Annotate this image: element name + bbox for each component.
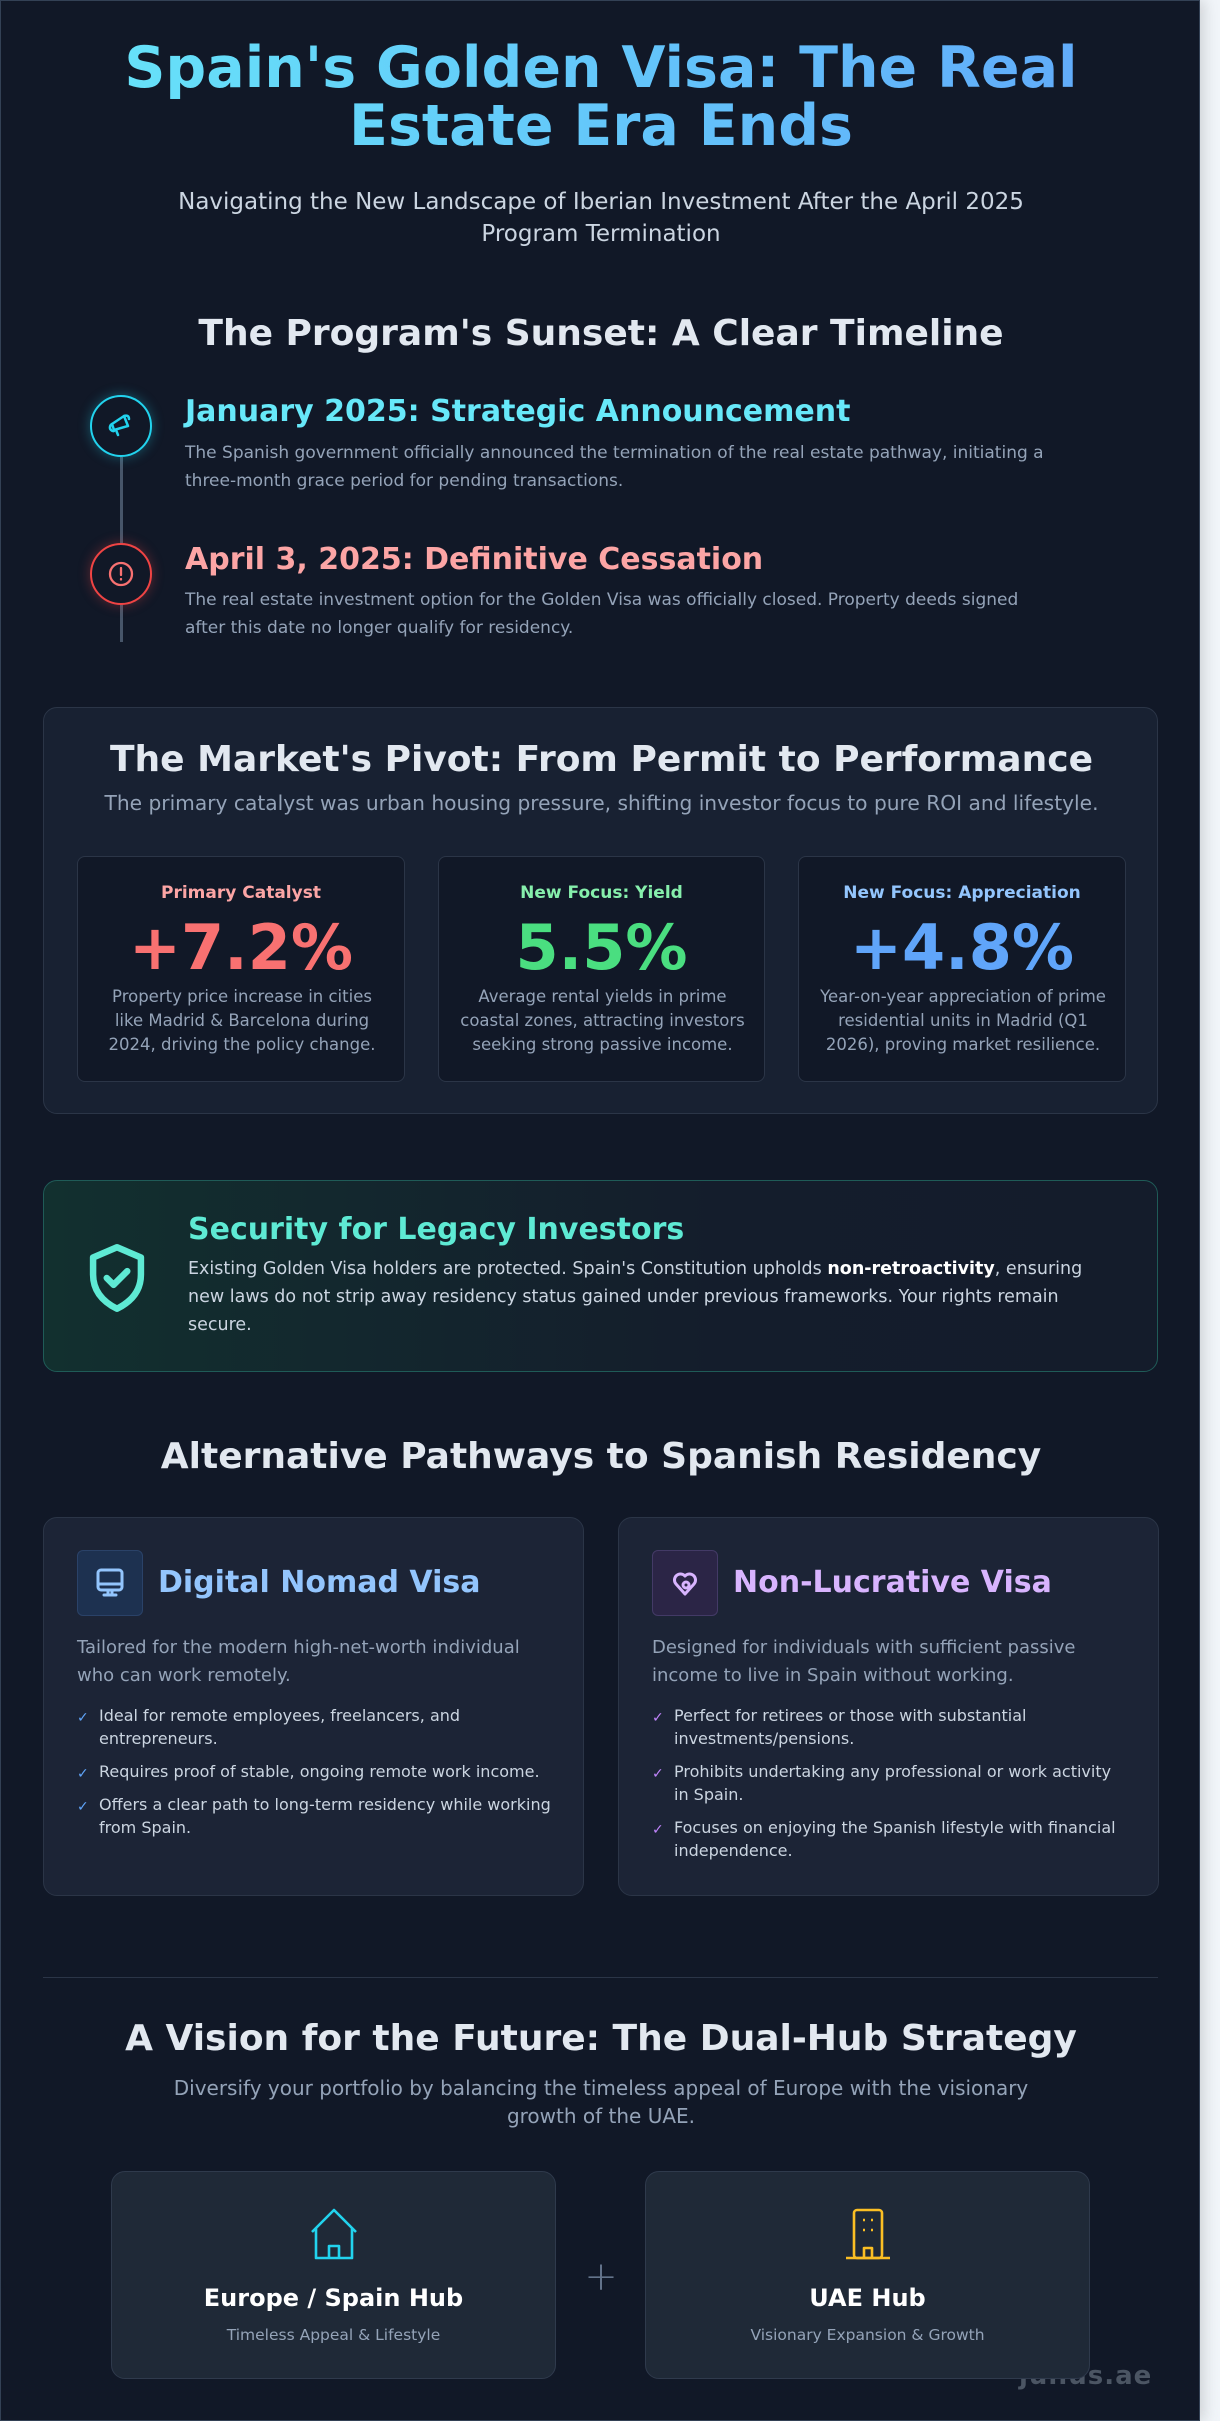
- plus sign: +: [584, 2254, 618, 2300]
- bullet list: Perfect for retirees or those with substantial investments/pensions.: [674, 1706, 1026, 1748]
- subtitle: The primary catalyst was urban housing pressure, shifting investor focus to pure ROI and lifestyle.: [104, 791, 1098, 815]
- title: Spain's Golden Visa: The Real: [124, 35, 1078, 101]
- desc: Tailored for the modern high-net-worth individual who can work remotely.: [77, 1637, 520, 1686]
- title: Estate Era Ends: [349, 93, 853, 159]
- title: Digital Nomad Visa: [158, 1565, 480, 1600]
- heading: Security for Legacy Investors: [188, 1212, 684, 1247]
- icon: building: [846, 2208, 890, 2260]
- heading: The Market's Pivot: From Permit to Performance: [110, 739, 1093, 780]
- icon: heart: [652, 1550, 718, 1616]
- stat card 1: [77, 856, 405, 1082]
- timeline line: [120, 457, 123, 642]
- hub card: UAE: Visionary Expansion & Growth: [750, 2326, 985, 2344]
- bullet list: [77, 1706, 551, 1837]
- hub card: UAE: UAE Hub: [809, 2284, 926, 2312]
- panel: market pivot: [43, 707, 1158, 1114]
- stat card 2: Average rental yields in prime coastal zones, attracting investors seeking strong passive income.: [460, 987, 745, 1054]
- timeline item 2: [84, 536, 1018, 638]
- bullet list: [652, 1706, 1116, 1860]
- stat card 3: +4.8%: [850, 911, 1074, 984]
- bullet list: ✓: [77, 1766, 89, 1782]
- heading: timeline: The Program's Sunset: A Clear Timeline: [198, 313, 1004, 354]
- title: Non-Lucrative Visa: [733, 1565, 1052, 1600]
- bullet list: ✓: [77, 1710, 89, 1726]
- bullet list: Requires proof of stable, ongoing remote work income.: [99, 1762, 540, 1781]
- heading: January: January 2025: Strategic Announcement: [185, 394, 850, 429]
- hub card: Europe: Timeless Appeal & Lifestyle: [227, 2326, 440, 2344]
- heading: alternatives: Alternative Pathways to Spanish Residency: [161, 1436, 1041, 1477]
- desc: Designed for individuals with sufficient passive income to live in Spain without working.: [652, 1637, 1076, 1686]
- text: The real estate investment option for the Golden Visa was officially closed. Property deeds signed after this date no longer qualify for residency.: [185, 590, 1018, 638]
- stat card 2: New Focus: Yield: [520, 883, 683, 903]
- icon: megaphone: [90, 395, 152, 457]
- stat card 2: [438, 856, 765, 1082]
- bullet list: ✓: [652, 1822, 664, 1838]
- watermark: julius.ae: [1019, 2361, 1152, 2391]
- bullet list: ✓: [652, 1766, 664, 1782]
- stat card 1: Primary Catalyst: [161, 883, 321, 903]
- bullet list: Ideal for remote employees, freelancers, and entrepreneurs.: [99, 1706, 460, 1748]
- stat card 3: [798, 856, 1126, 1082]
- heading: April: April 3, 2025: Definitive Cessation: [185, 542, 763, 577]
- heading: dual hub: A Vision for the Future: The Dual-Hub Strategy: [125, 2018, 1077, 2059]
- card: digital nomad: [43, 1517, 584, 1896]
- stat card 2: 5.5%: [516, 911, 687, 984]
- subtitle: Navigating the New Landscape of Iberian Investment After the April 2025 Program Termination: [178, 189, 1024, 247]
- text: The Spanish government officially announced the termination of the real estate pathway, initiating a three-month grace period for pending transactions.: [185, 443, 1044, 491]
- bullet list: Prohibits undertaking any professional or work activity in Spain.: [674, 1762, 1111, 1804]
- subtitle: Diversify your portfolio by balancing the timeless appeal of Europe with the visionary growth of the UAE.: [174, 2076, 1028, 2128]
- title: [1, 39, 1201, 155]
- hub card: Europe: Europe / Spain Hub: [204, 2284, 463, 2312]
- card: non-lucrative: [618, 1517, 1159, 1896]
- hub card: Europe: [111, 2171, 556, 2379]
- stat card 1: +7.2%: [129, 911, 353, 984]
- stat card 3: Year-on-year appreciation of prime residential units in Madrid (Q1 2026), proving market resilience.: [820, 987, 1106, 1054]
- stat card 3: New Focus: Appreciation: [843, 883, 1081, 903]
- icon: alert: [90, 543, 152, 605]
- bullet list: ✓: [77, 1799, 89, 1815]
- icon: shield: [90, 1244, 144, 1312]
- icon: house: [311, 2208, 357, 2260]
- timeline item 1: [84, 389, 1044, 491]
- bullet list: Offers a clear path to long-term residency while working from Spain.: [99, 1795, 551, 1837]
- bullet list: ✓: [652, 1710, 664, 1726]
- stat card 1: Property price increase in cities like Madrid & Barcelona during 2024, driving the policy change.: [109, 987, 375, 1054]
- text: Existing Golden Visa holders are protected. Spain's Constitution upholds non-retroactivity, ensuring new laws do not strip away residency status gained under previous frameworks. Your rights remain secure.: [188, 1259, 1082, 1335]
- icon: monitor: [77, 1550, 143, 1616]
- panel: security: [43, 1180, 1158, 1372]
- bullet list: Focuses on enjoying the Spanish lifestyle with financial independence.: [674, 1818, 1116, 1860]
- hub card: UAE: [645, 2171, 1090, 2379]
